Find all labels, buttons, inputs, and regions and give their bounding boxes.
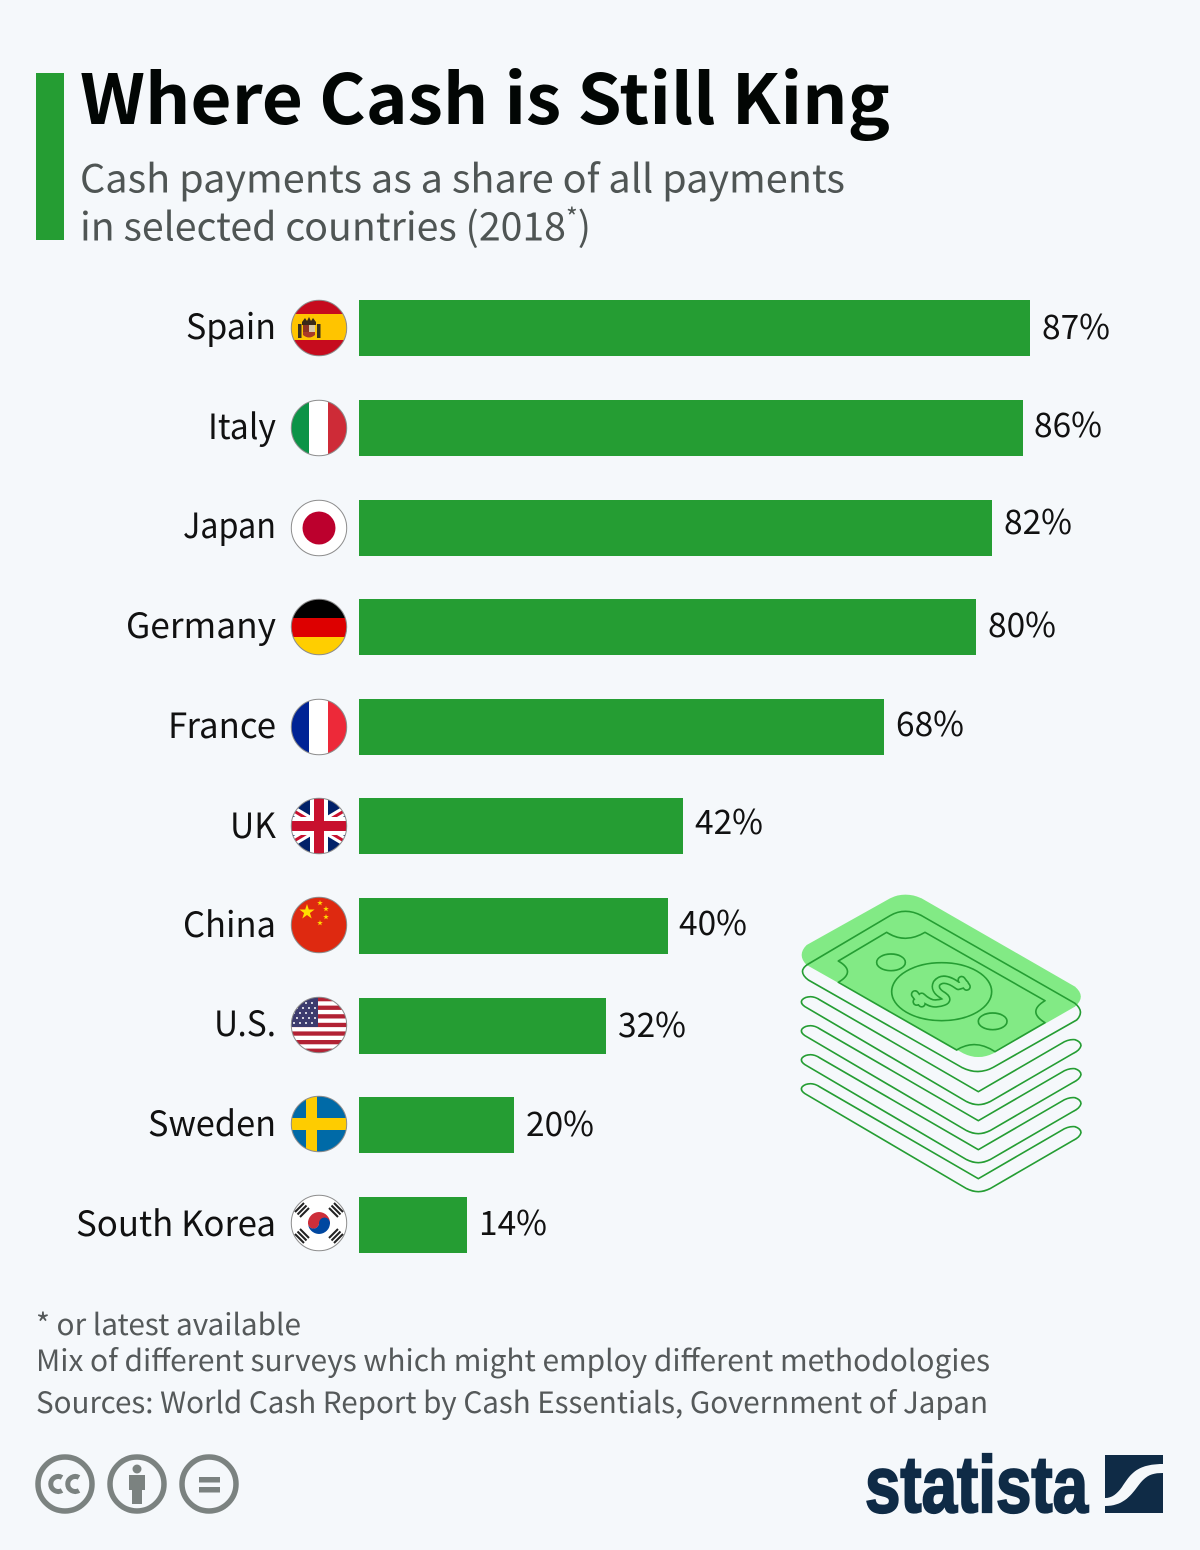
top bill outline: [802, 911, 1080, 1071]
icon: stack of banknotes: [801, 895, 1081, 1192]
footnotes: Sources: World Cash Report by Cash Essentials, Government of Japan: [36, 1380, 988, 1422]
row: U.S.: [214, 996, 686, 1054]
subtitle: ): [578, 196, 591, 252]
title: Where Cash is Still King: [80, 44, 890, 144]
row: Japan: 82%: [1004, 495, 1072, 544]
footnotes: * or latest available: [36, 1302, 301, 1344]
row: China: [183, 896, 747, 954]
row: Spain: Spain: [186, 299, 276, 350]
icon: creative commons: [38, 1457, 92, 1511]
bill inner border: [838, 932, 1045, 1052]
row: Japan: [183, 495, 1072, 556]
row: France: [168, 697, 964, 755]
subtitle: Cash payments as a share of all payments: [80, 148, 845, 204]
row: UK: 42%: [695, 795, 763, 844]
top bill fill: [802, 895, 1081, 1057]
statista logo: statista: [865, 1440, 1088, 1529]
row: Italy: [208, 398, 1102, 456]
row: France: France: [168, 698, 276, 749]
bar chart: [76, 299, 1110, 1253]
footnotes: Mix of different surveys which might employ different methodologies: [36, 1338, 990, 1380]
row: South Korea: [76, 1195, 547, 1253]
row: Sweden: 20%: [526, 1097, 594, 1146]
footnotes: [36, 1302, 990, 1422]
lower bill layers: [801, 997, 1081, 1192]
row: Spain: [186, 299, 1110, 356]
icon: attribution: [110, 1457, 164, 1511]
row: Germany: [126, 598, 1056, 655]
row: Japan: Japan: [183, 498, 276, 549]
row: South Korea: South Korea: [76, 1196, 276, 1247]
row: China: 40%: [679, 896, 747, 945]
row: South Korea: 14%: [479, 1196, 547, 1245]
row: U.S.: 32%: [618, 998, 686, 1047]
subtitle: in selected countries (2018: [80, 196, 563, 252]
subtitle: *: [566, 198, 578, 234]
dollar medallion: [877, 954, 1007, 1030]
row: Spain: 87%: [1042, 300, 1110, 349]
dollar sign: [915, 980, 967, 1003]
row: U.S.: U.S.: [214, 996, 276, 1047]
row: Italy: 86%: [1034, 398, 1102, 447]
row: Sweden: Sweden: [148, 1096, 276, 1147]
row: Germany: Germany: [126, 598, 276, 649]
row: France: 68%: [896, 697, 964, 746]
icon: no derivatives: [182, 1457, 236, 1511]
row: Sweden: [148, 1096, 594, 1153]
row: UK: [230, 795, 763, 854]
title accent bar: [36, 73, 64, 240]
row: China: China: [183, 897, 276, 948]
row: Germany: 80%: [988, 598, 1056, 647]
subtitle: [80, 148, 845, 252]
row: Italy: Italy: [208, 399, 276, 450]
row: UK: UK: [230, 798, 276, 849]
